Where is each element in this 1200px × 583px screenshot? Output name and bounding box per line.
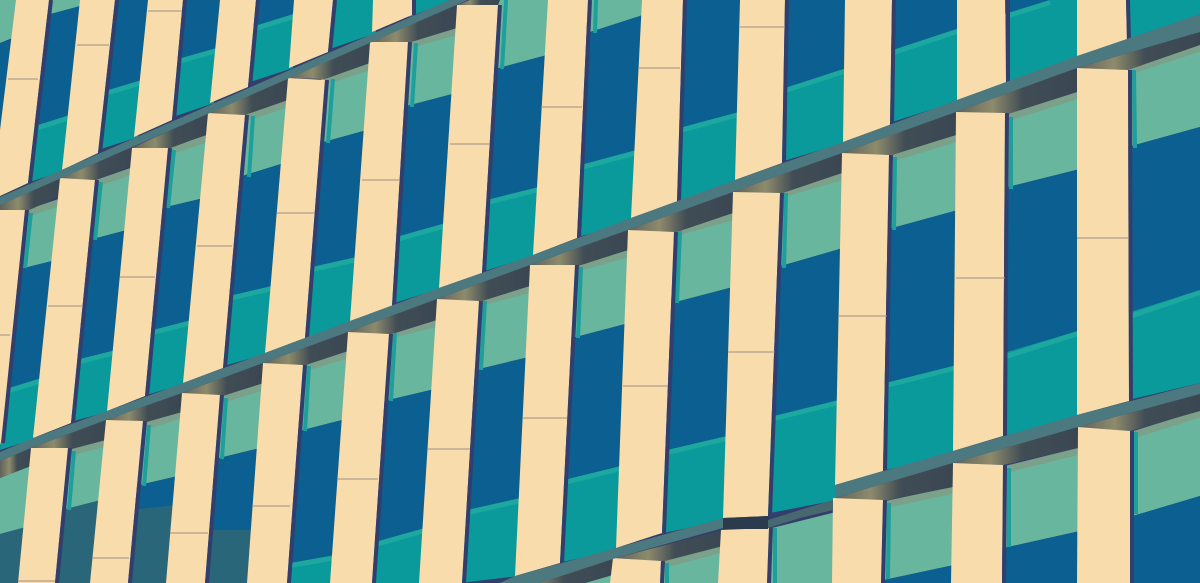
- ledge: short centre segment: [768, 500, 833, 528]
- bottom row of windows below third ledge: [585, 411, 1200, 583]
- ledge: top: [0, 0, 470, 205]
- ledge: lower left segment: [500, 518, 723, 583]
- ledge: middle: [0, 14, 1200, 461]
- ledge: lower right segment: [835, 383, 1200, 498]
- upper row of windows above first ledge: [0, 0, 452, 183]
- ledge: broken joint: [723, 516, 769, 529]
- middle row of windows between first and second ledge: [0, 0, 1200, 450]
